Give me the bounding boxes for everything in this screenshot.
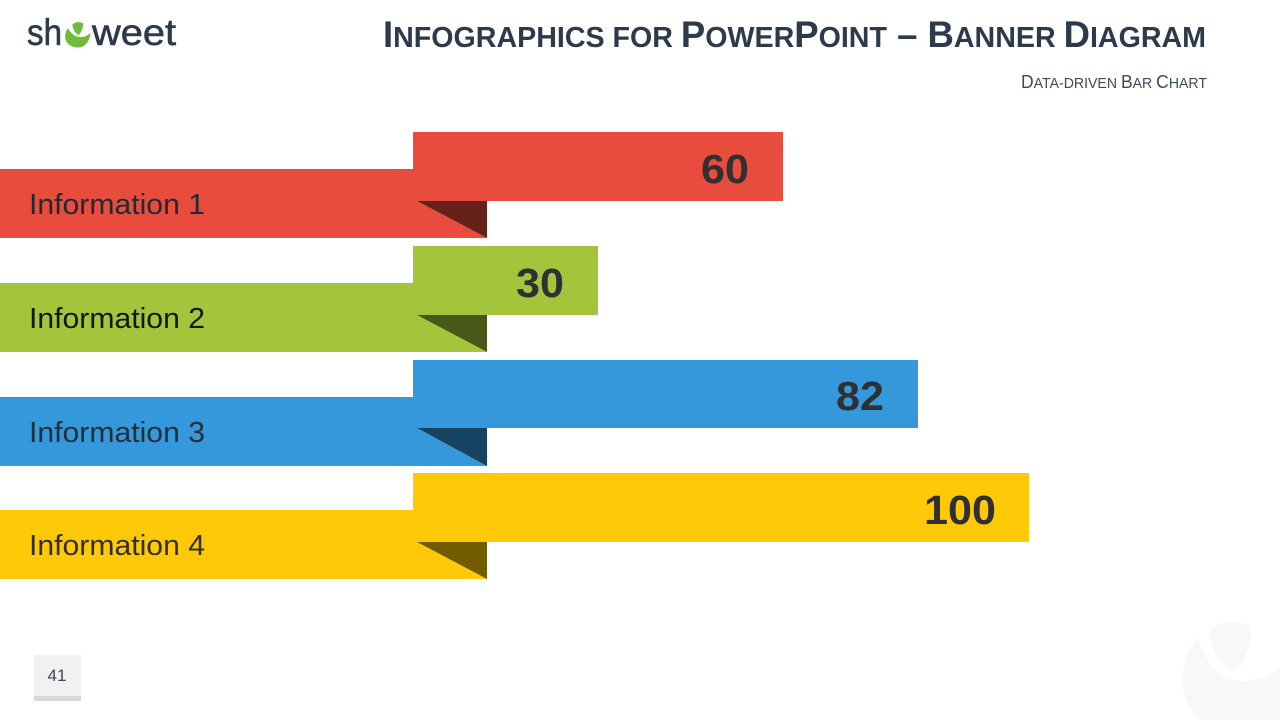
value: 82 [836,373,884,419]
banner 2: Information 2, value 30 [0,246,598,352]
label: Information 2 [29,303,205,335]
label: Information 4 [29,530,205,562]
value: 100 [924,487,996,533]
lower ribbon [0,397,487,466]
page number badge: 41 [48,666,66,685]
upper bar [413,132,783,201]
fold shadow [417,201,487,238]
lower ribbon [0,169,487,238]
lower ribbon [0,283,487,352]
subtitle: DATA-DRIVEN BAR CHART [1021,72,1207,92]
label: Information 3 [29,417,205,449]
banner 4: Information 4, value 100 [0,473,1029,579]
lower ribbon [0,510,487,579]
value: 60 [701,146,749,192]
fold shadow [417,428,487,466]
fold shadow [417,315,487,352]
logo: showeet: sh [27,12,62,53]
fold shadow [417,542,487,579]
logo: showeet: weet [91,12,177,53]
title: INFOGRAPHICS FOR POWERPOINT – BANNER DIAGRAM [383,14,1206,55]
label: Information 1 [29,189,205,221]
logo: showeet [27,12,177,53]
upper bar [413,360,918,428]
banner 1: Information 1, value 60 [0,132,783,238]
watermark logo [1183,622,1280,720]
icon: green logo mark [65,22,90,48]
upper bar [413,246,598,315]
page number badge [34,655,81,701]
banner 3: Information 3, value 82 [0,360,918,466]
value: 30 [516,260,564,306]
upper bar [413,473,1029,542]
